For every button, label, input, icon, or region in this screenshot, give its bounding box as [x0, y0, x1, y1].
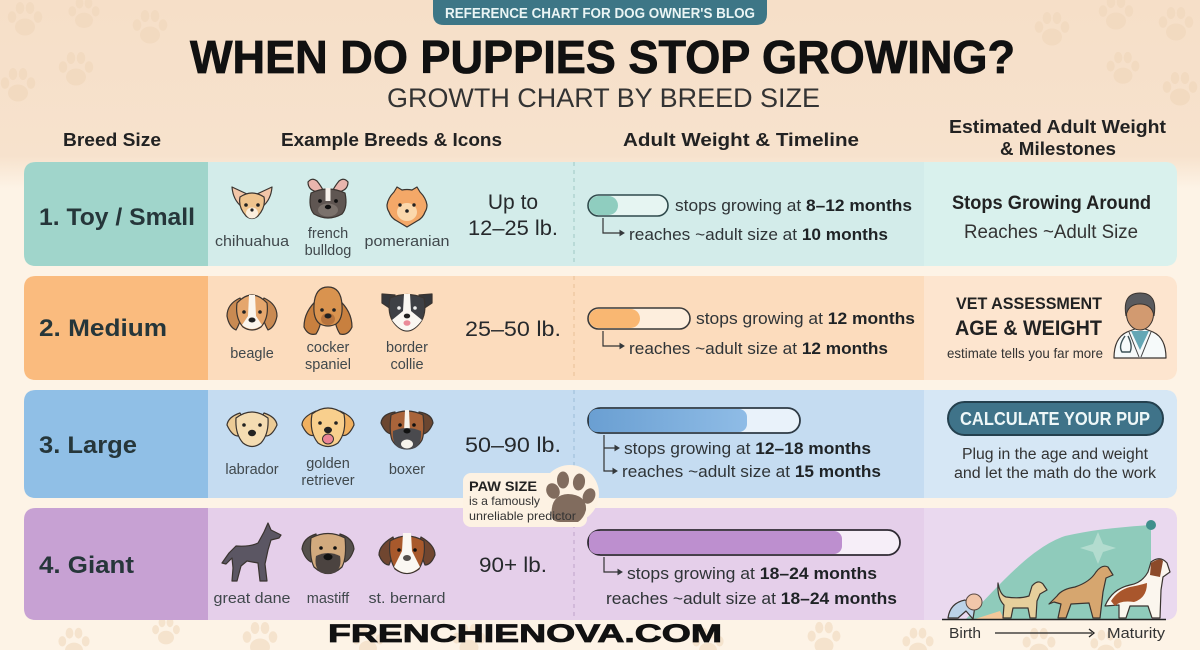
breed labels: labrador	[225, 462, 279, 478]
axis labels: Birth	[949, 625, 981, 642]
breed labels: mastiff	[307, 591, 350, 607]
ground line	[942, 618, 1166, 620]
milestone: calculate your pup: CALCULATE YOUR PUP	[960, 409, 1150, 429]
breed labels: golden	[306, 456, 350, 472]
growth curve chart	[942, 520, 1170, 642]
breed labels	[215, 226, 450, 259]
background paw prints top	[1, 0, 1197, 106]
timeline text: stops growing at 8–12 months	[675, 196, 912, 215]
milestone: calculate your pup	[948, 402, 1163, 482]
timeline text: stops growing at 18–24 months	[627, 564, 877, 583]
row label: 3. Large	[39, 432, 137, 459]
top tag: reference chart label	[433, 0, 767, 25]
breed labels: pomeranian	[364, 234, 450, 250]
timeline text: reaches ~adult size at 18–24 months	[606, 589, 897, 608]
timeline bar	[588, 308, 690, 329]
panel: row 2 medium	[24, 276, 1177, 380]
icon: mastiff	[302, 534, 354, 574]
milestone: vet assessment: estimate tells you far more	[947, 345, 1103, 361]
background paw prints bottom	[58, 618, 1122, 650]
timeline text	[603, 196, 912, 244]
icon: chihuahua	[232, 187, 272, 218]
row label: 2. Medium	[39, 315, 167, 342]
timeline text: stops growing at 12 months	[696, 309, 915, 328]
timeline text: reaches ~adult size at 10 months	[629, 225, 888, 244]
st. bernard dog	[1105, 559, 1170, 618]
icon: veterinarian	[1114, 293, 1166, 358]
breed labels: spaniel	[305, 357, 351, 373]
breed labels: border	[386, 340, 428, 356]
milestone: vet assessment	[947, 295, 1103, 361]
footer site name: FRENCHIENOVA.COM	[328, 620, 722, 648]
weight	[468, 191, 558, 240]
row label: 4. Giant	[39, 552, 134, 579]
row label: 1. Toy / Small	[39, 204, 195, 231]
icon: paw	[544, 472, 598, 522]
breed labels	[214, 591, 446, 607]
weight: 25–50 lb.	[465, 318, 561, 341]
subtitle: GROWTH CHART BY BREED SIZE	[387, 83, 820, 113]
column headings	[63, 117, 1166, 159]
breed labels	[230, 340, 428, 373]
growth area	[966, 525, 1151, 619]
weight: 90+ lb.	[479, 554, 547, 577]
milestone text	[952, 193, 1151, 243]
icon: golden retriever	[302, 408, 354, 446]
milestone: calculate your pup: Plug in the age and weight	[962, 446, 1149, 463]
callout: paw size: PAW SIZE	[469, 478, 537, 494]
timeline bar	[588, 195, 668, 216]
icon: st. bernard	[379, 533, 435, 574]
callout: paw size: unreliable predictor	[469, 509, 576, 523]
breed labels: french	[308, 226, 348, 242]
breed labels: retriever	[301, 473, 355, 489]
icon: pomeranian	[387, 187, 427, 227]
column headings: Estimated Adult Weight	[949, 117, 1166, 137]
breed labels: cocker	[307, 340, 350, 356]
puppy	[998, 582, 1047, 618]
timeline text: reaches ~adult size at 15 months	[622, 462, 881, 481]
milestone text: Reaches ~Adult Size	[964, 222, 1138, 243]
column headings: & Milestones	[1000, 139, 1116, 159]
icon: boxer	[381, 410, 433, 450]
breed labels: beagle	[230, 346, 274, 362]
breed labels: collie	[390, 357, 424, 373]
column headings: Breed Size	[63, 130, 161, 150]
timeline text	[604, 557, 897, 608]
weight: 50–90 lb.	[465, 434, 561, 457]
panel: row 1 toy / small	[24, 162, 1177, 266]
callout: paw size: is a famously	[469, 494, 540, 508]
timeline text: stops growing at 12–18 months	[624, 439, 871, 458]
panel: row 3 large	[24, 390, 1177, 498]
timeline text	[603, 309, 915, 358]
icon: cocker spaniel	[304, 287, 352, 334]
icon: beagle	[227, 295, 277, 330]
breed labels: chihuahua	[215, 234, 290, 250]
breed labels: great dane	[214, 591, 290, 607]
timeline bar	[588, 408, 800, 433]
column headings: Example Breeds & Icons	[281, 130, 502, 150]
top tag: reference chart label: REFERENCE CHART FOR DOG OWNER'S BLOG	[445, 6, 755, 22]
adult dog	[1049, 566, 1113, 618]
panel: row 4 giant	[24, 508, 1177, 642]
breed labels	[225, 456, 425, 489]
column headings: Adult Weight & Timeline	[623, 130, 859, 150]
timeline text: reaches ~adult size at 12 months	[629, 339, 888, 358]
breed labels: boxer	[389, 462, 425, 478]
breed labels: st. bernard	[368, 591, 446, 607]
breed labels: bulldog	[305, 243, 351, 259]
title: WHEN DO PUPPIES STOP GROWING?	[190, 31, 1015, 83]
weight: 12–25 lb.	[468, 217, 558, 240]
icon: great dane	[222, 523, 281, 581]
weight: Up to	[488, 191, 538, 214]
icon: labrador	[227, 412, 277, 446]
growth curve chart: Maturity	[1107, 625, 1166, 642]
baby	[948, 594, 982, 619]
milestone: vet assessment: VET ASSESSMENT	[956, 295, 1102, 313]
milestone: calculate your pup: and let the math do the work	[954, 465, 1156, 482]
callout: paw size	[463, 465, 599, 527]
milestone: vet assessment: AGE & WEIGHT	[955, 317, 1102, 340]
timeline text	[604, 435, 881, 481]
icon: border collie	[382, 294, 432, 331]
timeline bar	[588, 530, 900, 555]
milestone text: Stops Growing Around	[952, 193, 1151, 214]
icon: french bulldog	[308, 179, 348, 218]
